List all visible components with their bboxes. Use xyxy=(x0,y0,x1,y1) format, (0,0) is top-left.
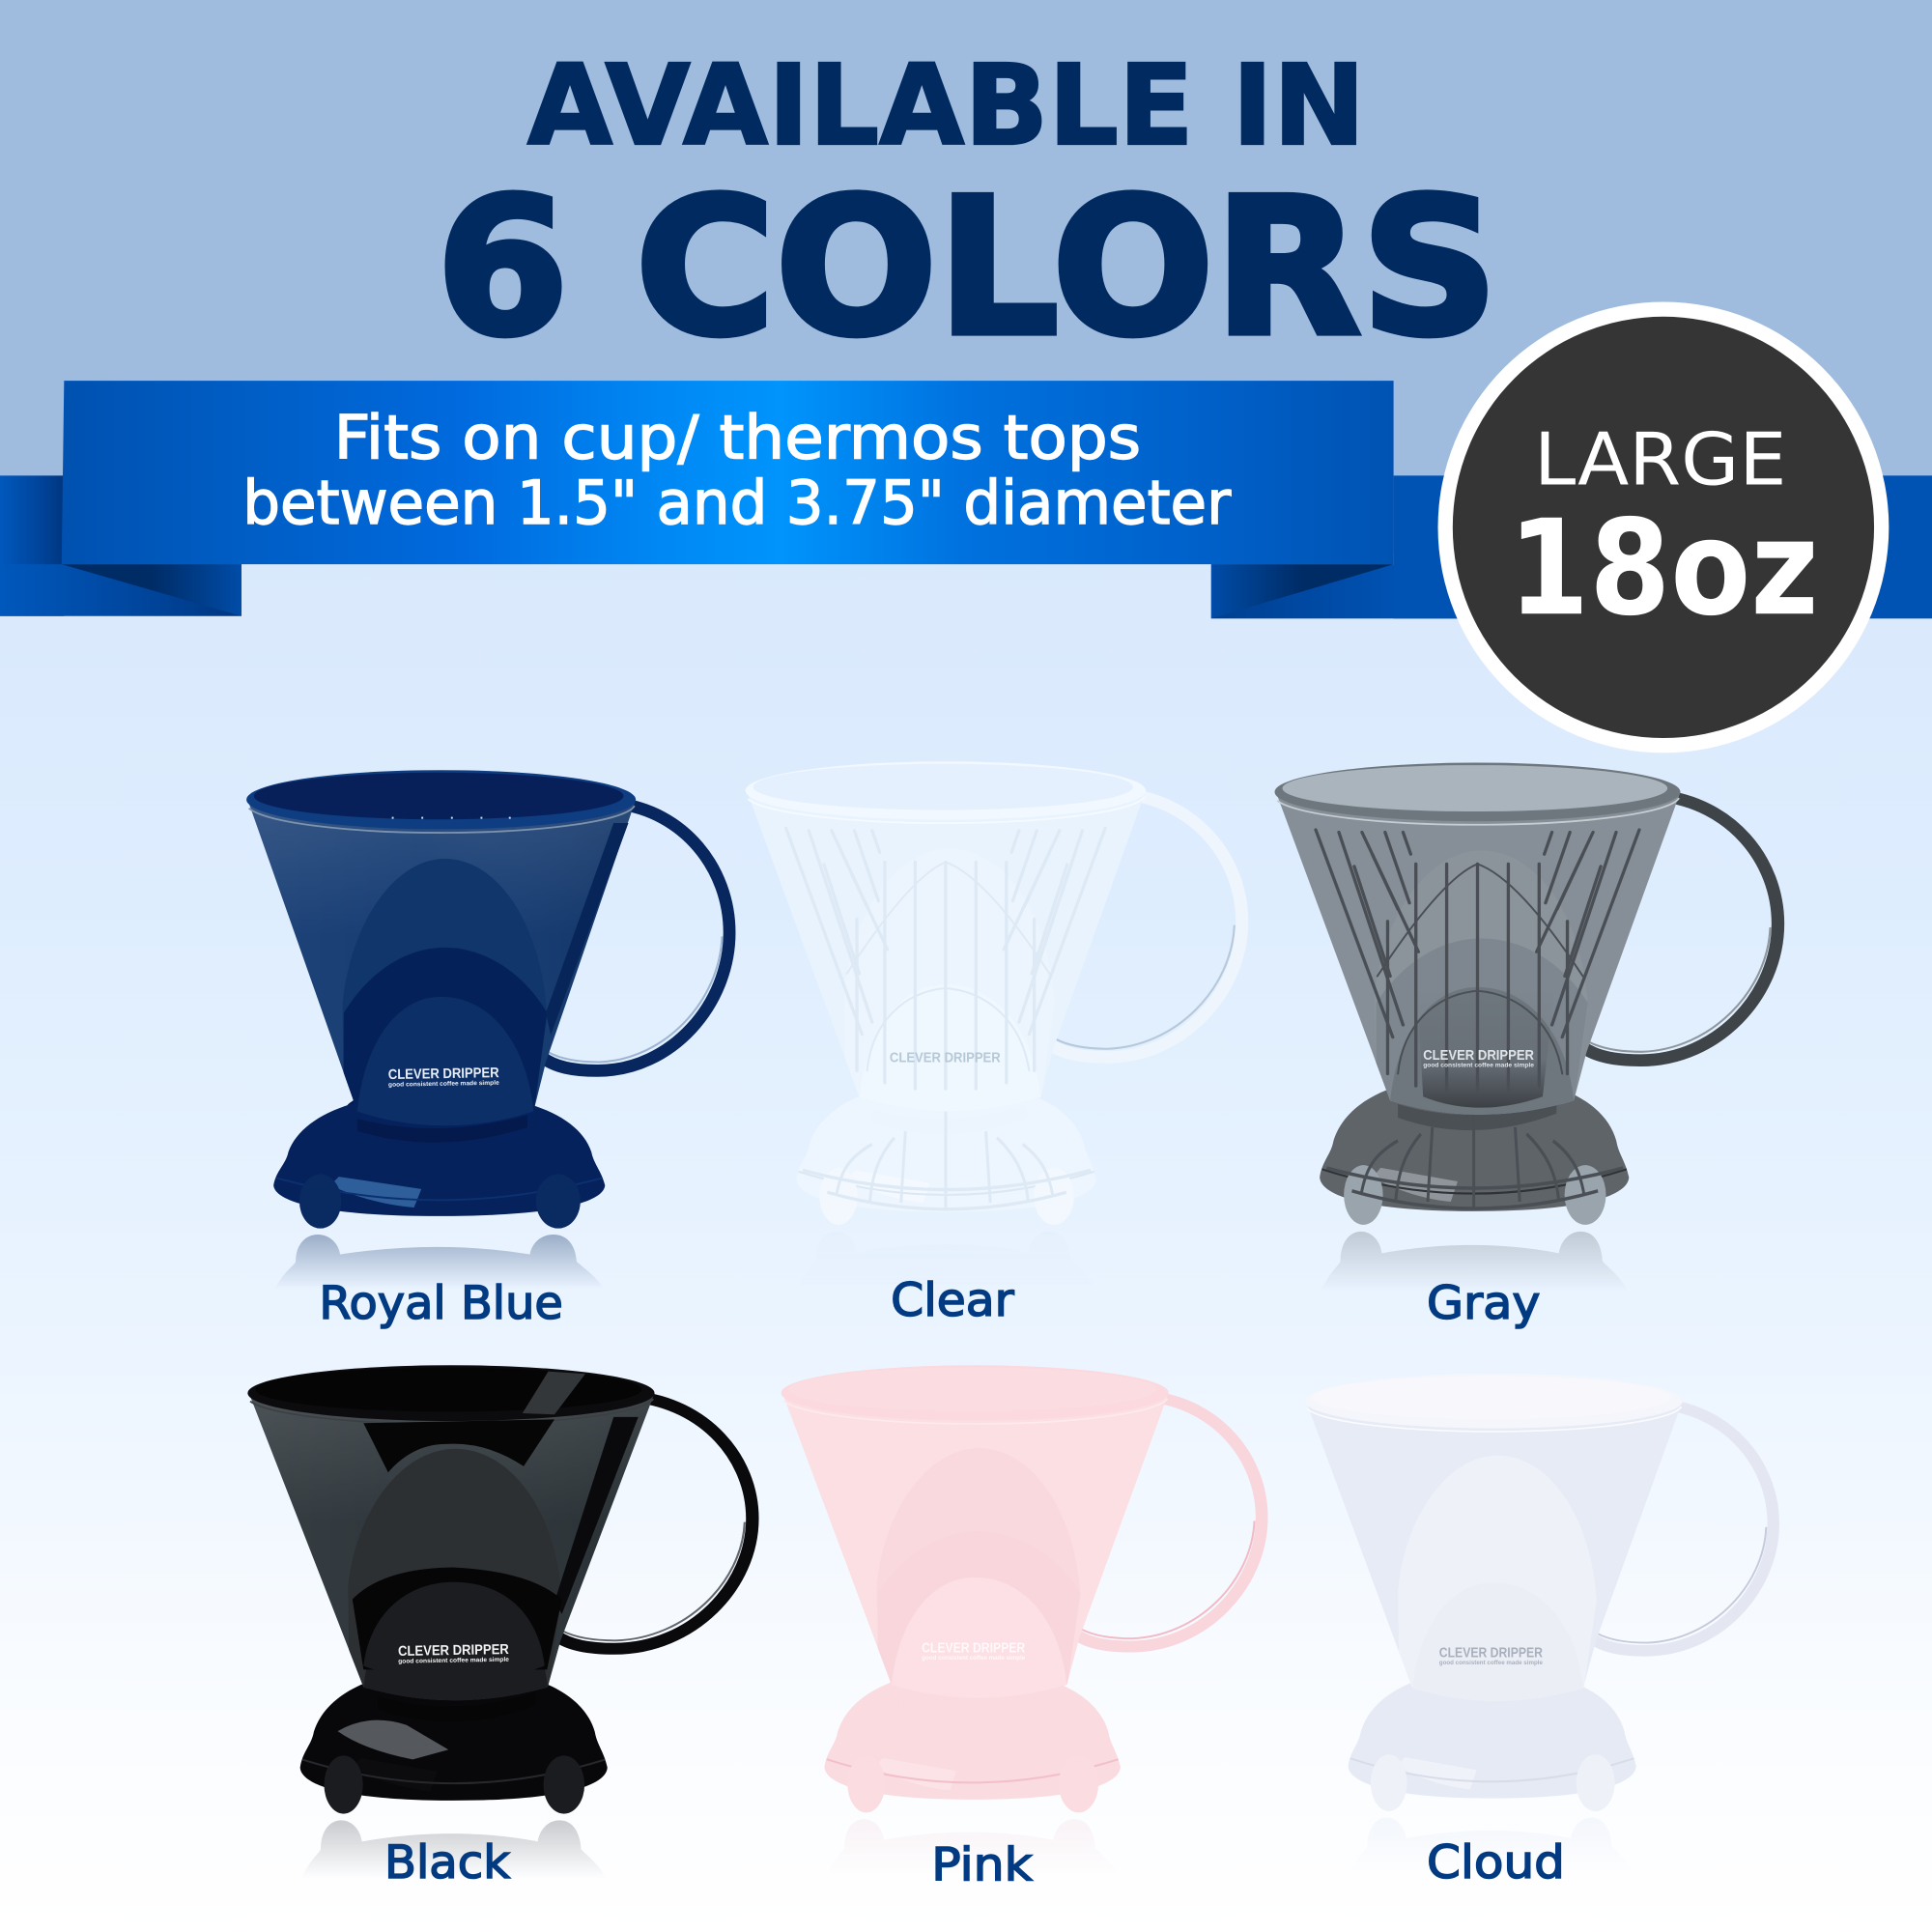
logo: black xyxy=(398,1642,510,1665)
logo: gray: good consistent coffee made simple xyxy=(1423,1063,1534,1069)
logo: cloud: CLEVER DRIPPER xyxy=(1439,1646,1543,1662)
dripper: cloud xyxy=(1305,1374,1774,1874)
logo: gray xyxy=(1423,1048,1534,1069)
size badge: large 18oz: LARGE xyxy=(1534,416,1786,501)
logo: cloud: good consistent coffee made simple xyxy=(1439,1660,1543,1666)
logo: black: good consistent coffee made simple xyxy=(398,1657,510,1665)
ribbon text xyxy=(242,402,1232,538)
label: black: Black xyxy=(384,1836,511,1889)
logo: royal blue xyxy=(388,1065,499,1089)
label: royal blue: Royal Blue xyxy=(319,1277,563,1330)
logo: black: CLEVER DRIPPER xyxy=(398,1642,509,1660)
size badge: large 18oz xyxy=(1438,301,1889,753)
dripper: gray xyxy=(1275,763,1778,1292)
title: 6 colors: 6 COLORS xyxy=(437,158,1498,378)
logo: pink: CLEVER DRIPPER xyxy=(922,1640,1026,1656)
logo: gray: CLEVER DRIPPER xyxy=(1423,1048,1534,1064)
label: pink: Pink xyxy=(931,1838,1034,1891)
label: gray: Gray xyxy=(1427,1277,1540,1330)
dripper: clear xyxy=(746,761,1242,1289)
title: available in: AVAILABLE IN xyxy=(527,42,1365,171)
logo: pink: good consistent coffee made simple xyxy=(922,1655,1026,1662)
logo: royal blue: CLEVER DRIPPER xyxy=(388,1065,499,1083)
label: cloud: Cloud xyxy=(1427,1836,1565,1889)
label: clear: Clear xyxy=(891,1274,1014,1327)
dripper: pink xyxy=(781,1365,1262,1876)
logo: clear: CLEVER DRIPPER xyxy=(890,1050,1001,1065)
ribbon banner xyxy=(0,381,1932,618)
logo: pink xyxy=(922,1640,1026,1662)
ribbon text: between 1.5" and 3.75" diameter xyxy=(242,468,1232,538)
dripper: royal blue xyxy=(246,770,729,1289)
logo: cloud xyxy=(1439,1646,1543,1666)
size badge: large 18oz: 18oz xyxy=(1508,492,1819,645)
ribbon text: Fits on cup/ thermos tops xyxy=(334,402,1141,472)
logo: royal blue: good consistent coffee made simple xyxy=(388,1080,499,1089)
dripper: black xyxy=(247,1365,753,1879)
